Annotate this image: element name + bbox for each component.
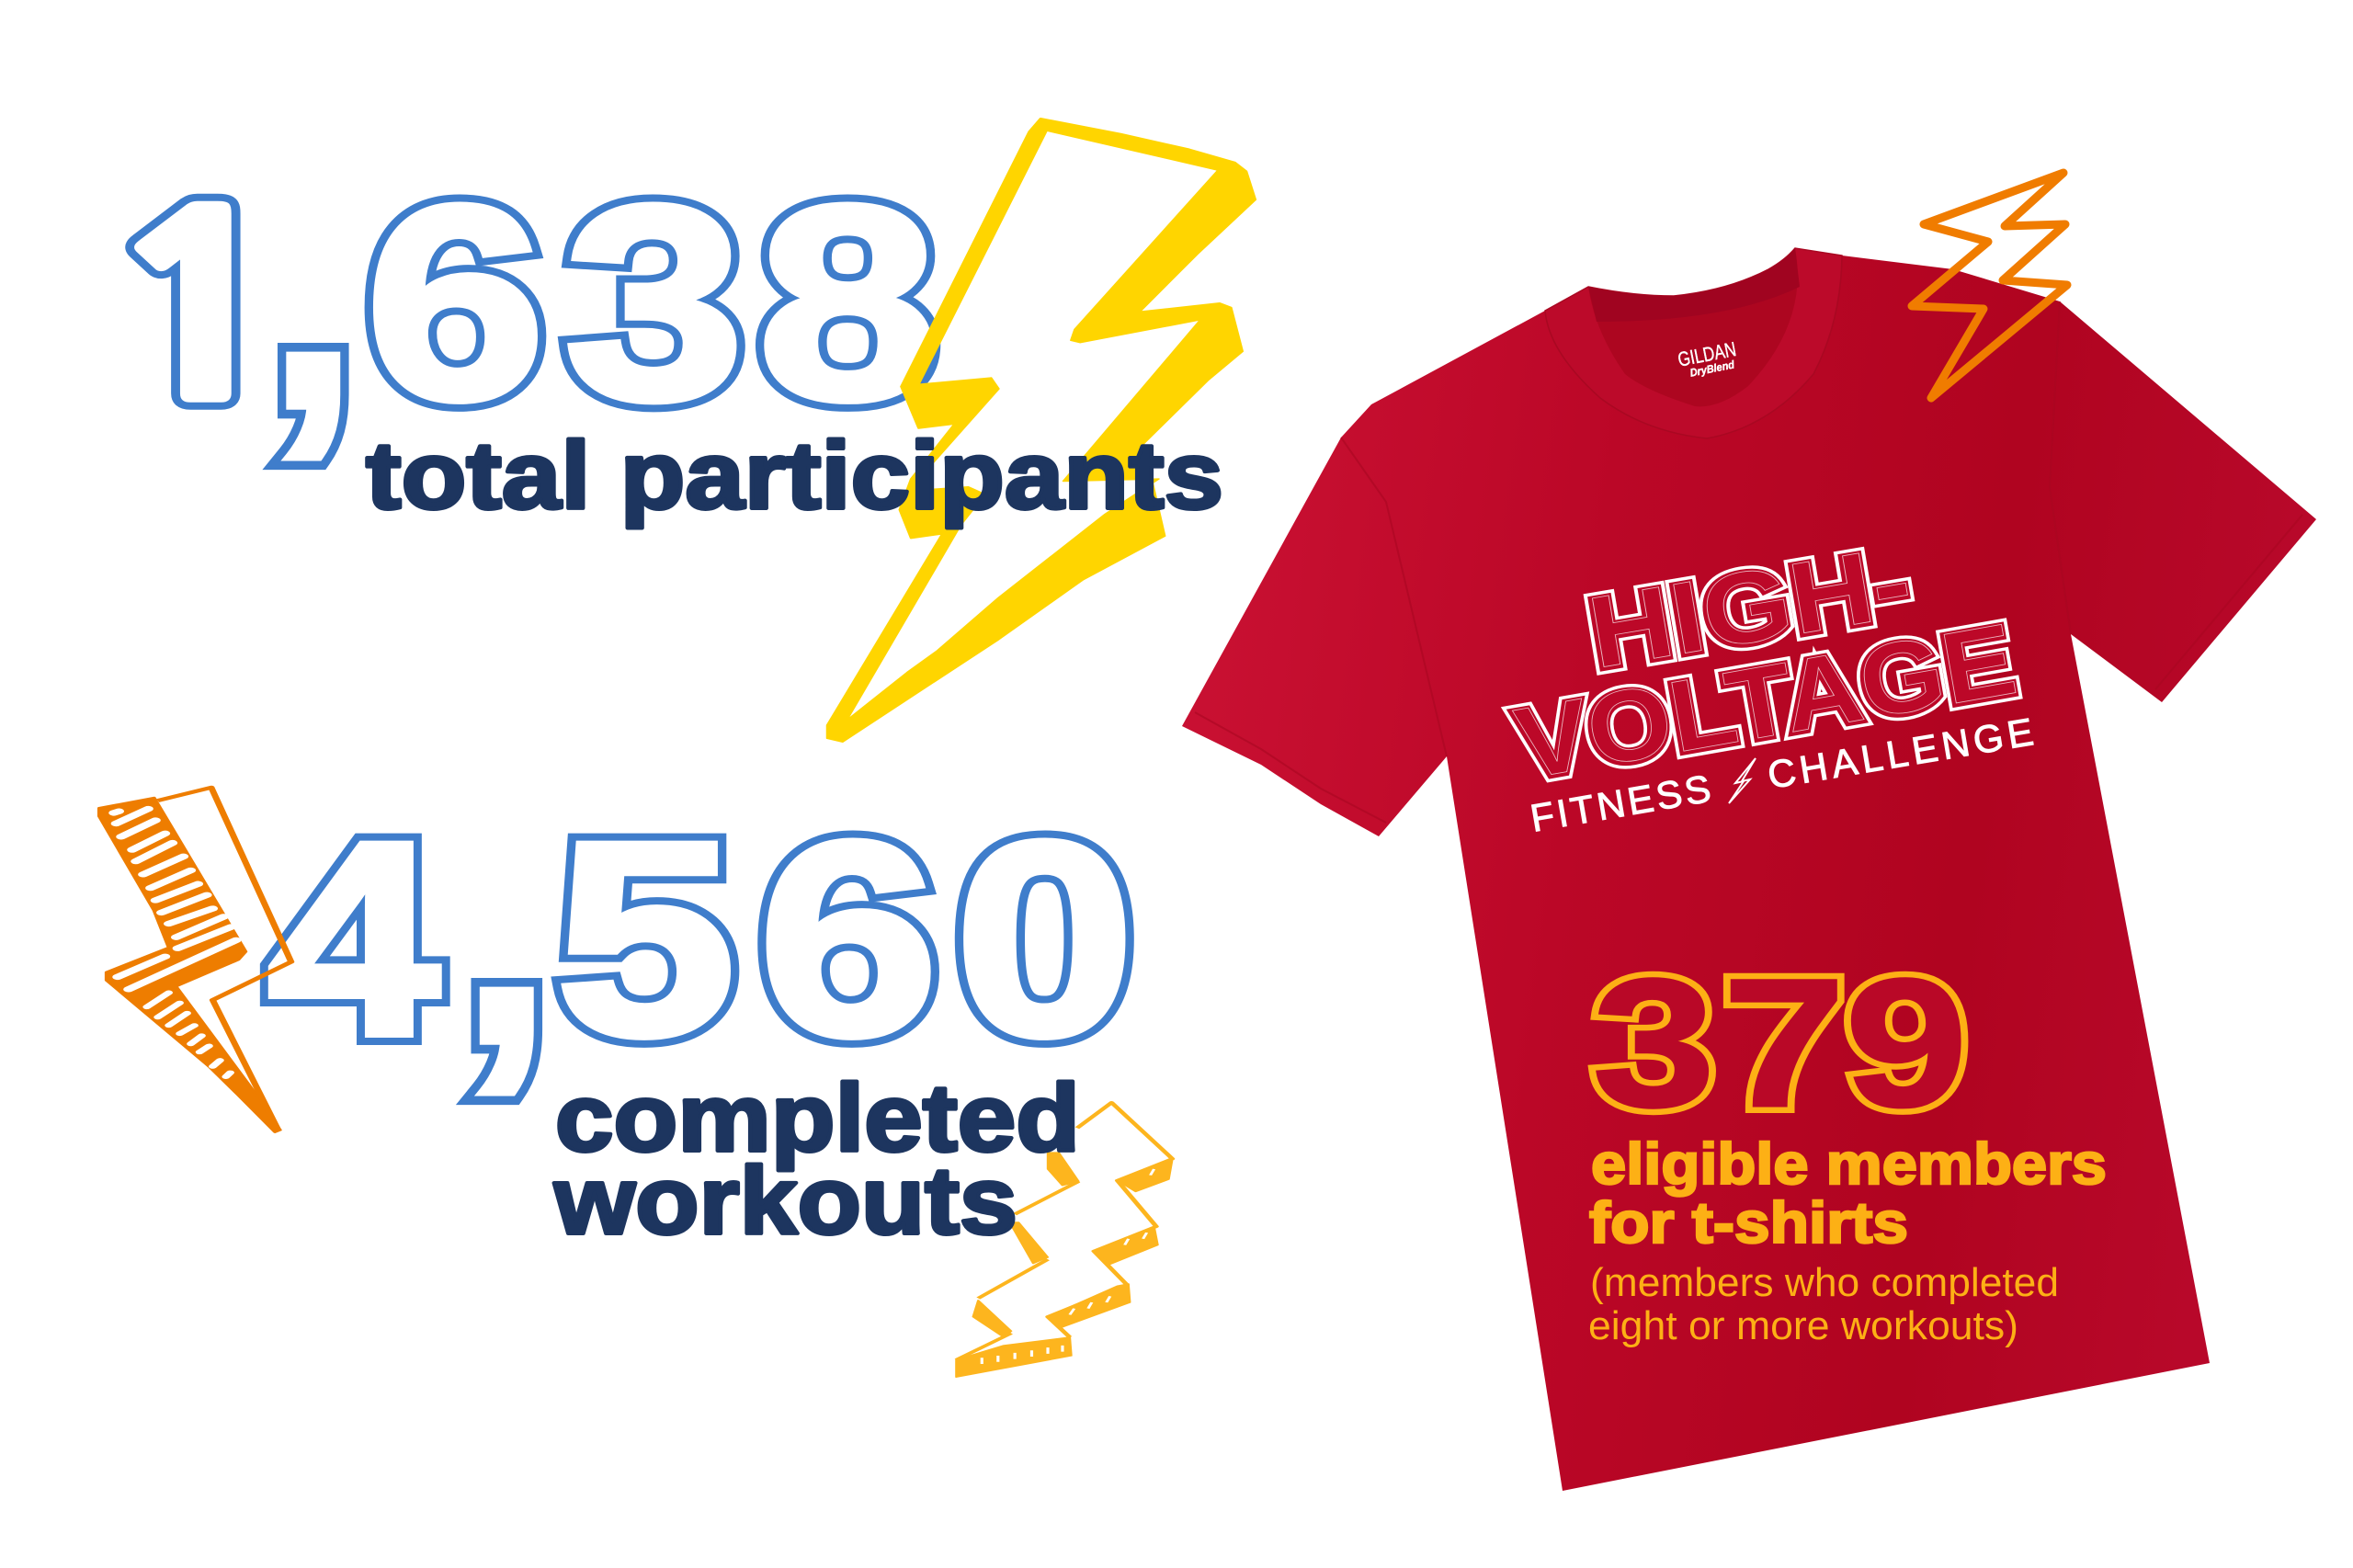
stat number: 4,560: 4	[267, 786, 441, 1093]
stat number: 1,638: 638	[366, 149, 938, 457]
label: eligible members for t-shirts	[1589, 1132, 2107, 1256]
stat number: 1,638	[107, 107, 938, 476]
label: completed workouts: workouts	[553, 1148, 1017, 1255]
stat number: 4,560: 4	[267, 786, 441, 1093]
neck tag: Gildan: DryBlend	[1688, 358, 1736, 380]
inside of neck	[1588, 248, 1798, 406]
label: completed workouts	[553, 1065, 1080, 1255]
stat number: 4,560	[267, 742, 1134, 1111]
stat number: 1,638: ,	[268, 107, 358, 476]
icon: orange hatched lightning bolt	[99, 788, 291, 1132]
label: completed workouts: completed	[555, 1065, 1080, 1172]
note: members who completed eight or more workouts: eight or more workouts)	[1588, 1303, 2018, 1348]
stat number: 4,560: 560	[556, 785, 1134, 1093]
logo word: VOLTAGE: VOLTAGE	[1507, 603, 2023, 802]
shirt print: High-Voltage Fitness Challenge logo	[1507, 525, 2036, 840]
note: members who completed eight or more workouts: (members who completed	[1590, 1260, 2059, 1305]
note: members who completed eight or more workouts	[1588, 1260, 2059, 1348]
stat number: 1,638: 638	[366, 149, 938, 457]
panel: red t-shirt	[1182, 248, 2316, 1491]
logo word: HIGH-: HIGH-	[1581, 525, 1919, 690]
logo line: FITNESS: FITNESS	[1528, 767, 1714, 840]
logo icon: mini bolt	[1729, 758, 1756, 803]
stat number: 379: 379	[1593, 941, 1968, 1144]
back of neck	[1588, 248, 1800, 322]
collar band	[1545, 248, 1842, 438]
stat number: 4,560: ,	[461, 742, 551, 1111]
stat number: 1,638: 1	[107, 184, 292, 434]
logo word: HIGH-: HIGH-	[1580, 526, 1918, 691]
logo word: VOLTAGE: VOLTAGE	[1507, 603, 2023, 802]
shirt body	[1182, 248, 2316, 1491]
neck tag: Gildan: GILDAN	[1676, 337, 1738, 371]
logo word: VOLTAGE: VOLTAGE	[1508, 602, 2024, 801]
neck tag: Gildan	[1676, 337, 1740, 381]
icon: yellow ribbon lightning bolt	[956, 1103, 1173, 1377]
label: eligible members for t-shirts: eligible members	[1591, 1132, 2107, 1197]
logo word: HIGH-: HIGH-	[1580, 526, 1918, 691]
label: total participants: total participants	[366, 423, 1223, 529]
stat number: 379: 379	[1593, 941, 1968, 1144]
stat number: 1,638: 1	[107, 184, 292, 434]
logo line: CHALLENGE: CHALLENGE	[1765, 710, 2036, 797]
stat number: 1,638: ,	[268, 107, 358, 476]
stat number: 4,560: 560	[556, 785, 1134, 1093]
icon: large yellow lightning bolt	[827, 119, 1256, 742]
shirt seams	[1195, 301, 2302, 823]
icon: small orange lightning bolt on shoulder	[1912, 173, 2067, 398]
stat number: 4,560: ,	[461, 742, 551, 1111]
label: eligible members for t-shirts: for t-shirts	[1589, 1191, 1908, 1256]
